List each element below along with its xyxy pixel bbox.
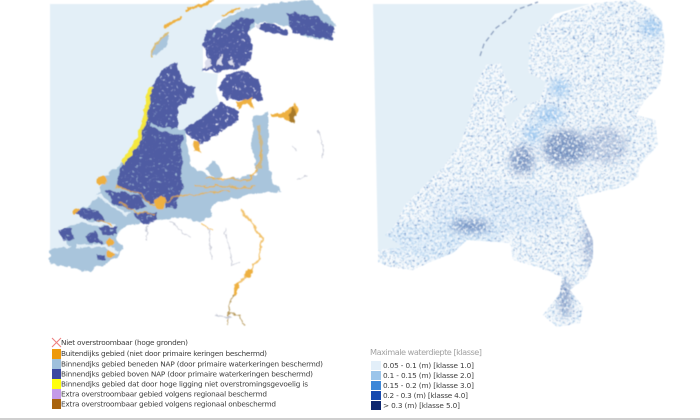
legend item: klasse 4: 0.2 - 0.3 (m) [klasse 4.0] [383, 391, 468, 400]
legend item: hoge ligging: Binnendjks gebied dat door hoge ligging niet overstromingsgevoelig is [61, 380, 308, 388]
yellow dunes [124, 90, 150, 162]
legend item: regionaal beschermd: Extra overstroombaar gebied volgens regionaal beschermd [61, 390, 267, 398]
legend title: Maximale waterdiepte [klasse] [370, 347, 482, 357]
map: overstroombaarheid (left) [50, 0, 335, 327]
right map Waddeneiland traces [480, 2, 538, 56]
Noordoostpolder [218, 70, 262, 100]
darker blue pockets: central rivers [450, 127, 627, 318]
legend: overstroombaarheid [52, 338, 323, 409]
extra overstroombaar regionaal (purple-grey traces) [146, 130, 324, 318]
extra overstroombaar onbeschermd (brown) [289, 106, 296, 123]
sea channels through the delta [60, 196, 128, 252]
Texel [153, 33, 168, 57]
light band across Holland [151, 125, 183, 134]
sea: left map [50, 4, 262, 250]
Groningen [257, 13, 335, 40]
buitendijks: rivers and estuary [97, 125, 262, 287]
right map land base [508, 23, 631, 316]
delta polders [57, 190, 177, 260]
binnendijks beneden NAP: west and river area [50, 87, 282, 272]
Friesland [203, 17, 253, 72]
legend item: regionaal onbeschermd: Extra overstroombaar gebied volgens regionaal onbeschermd [61, 400, 276, 408]
right map sea and IJsselmeer [373, 4, 590, 250]
legend item: klasse 3: 0.15 - 0.2 (m) [klasse 3.0] [383, 381, 474, 390]
Flevoland [183, 103, 237, 143]
white gaps in Friesland [203, 22, 262, 68]
legend item: klasse 2: 0.1 - 0.15 (m) [klasse 2.0] [383, 371, 474, 380]
legend item: klasse 5: > 0.3 (m) [klasse 5.0] [383, 401, 460, 410]
legend item: buitendijks gebied: Buitendijks gebied (niet door primaire keringen beschermd) [61, 349, 267, 358]
Maas south [227, 287, 244, 327]
legend item: binnendijks boven NAP: Binnendjks gebied boven NAP (door primaire waterkeringen beschermd) [61, 370, 313, 378]
buitendijks: Wadden islands [153, 1, 240, 57]
binnendijks beneden NAP: Friesland and Groningen coast [203, 0, 335, 43]
binnendijks boven NAP: all polder areas [57, 13, 335, 260]
legend item: binnendijks beneden NAP: Binnendjks gebied beneden NAP (door primaire waterkeringen beschermd) [61, 360, 323, 368]
legend item: niet overstroombaar: Niet overstroombaar (hoge gronden) [61, 338, 188, 347]
buitendijks blobs [74, 98, 298, 294]
binnendijks beneden NAP: Gelderse Vallei [205, 160, 222, 182]
right map speckle layers [373, 0, 673, 332]
legend: maximale waterdiepte [370, 347, 482, 410]
light blue pockets: Flevoland, Groningen [380, 18, 664, 260]
map: maximale waterdiepte (right) [373, 0, 673, 332]
North and South Holland [117, 63, 195, 204]
legend item: klasse 1: 0.05 - 0.1 (m) [klasse 1.0] [383, 361, 474, 370]
